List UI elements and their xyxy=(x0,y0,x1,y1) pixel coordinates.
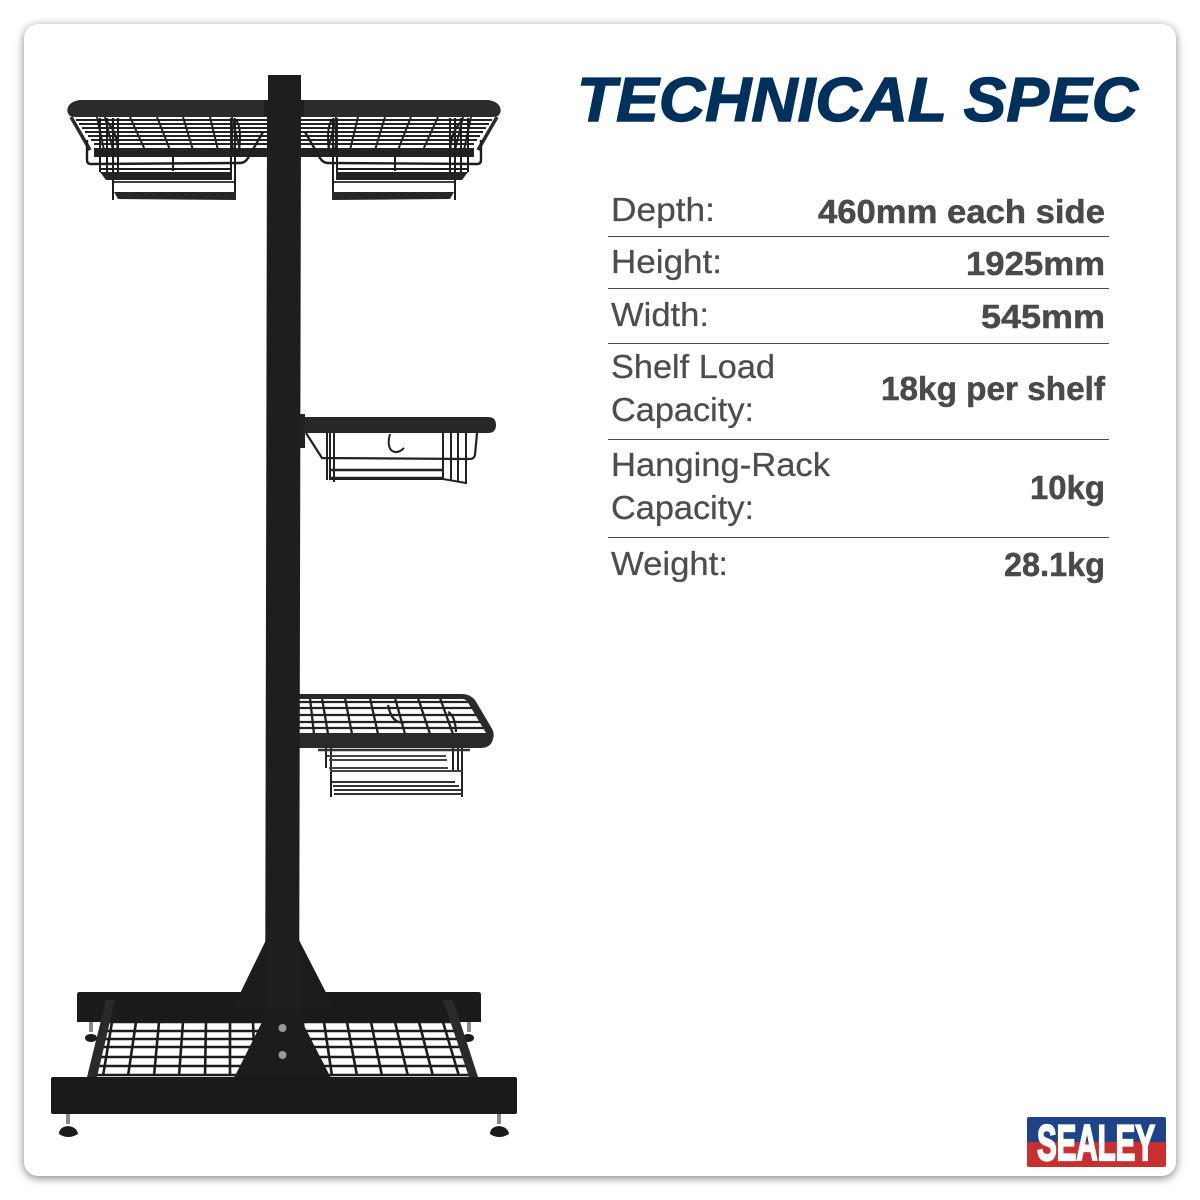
row: height: 1925mm xyxy=(966,245,1105,282)
row: hanging-rack capacity xyxy=(608,446,1109,538)
product: storage rack xyxy=(51,75,517,1137)
row: hanging-rack capacity: Hanging-Rack xyxy=(611,446,831,483)
row: width: 545mm xyxy=(981,298,1105,335)
row: width: Width: xyxy=(611,296,709,333)
row: shelf load capacity: Shelf Load xyxy=(611,348,775,385)
top shelf left xyxy=(67,100,272,200)
row: depth: Depth: xyxy=(611,191,715,228)
lower shelf xyxy=(296,694,494,797)
row: height: Height: xyxy=(611,243,722,280)
front base rail xyxy=(51,1077,517,1114)
levelling feet xyxy=(59,1114,509,1137)
front gusset with bolts xyxy=(234,1012,331,1081)
central post xyxy=(264,75,304,1080)
base mesh xyxy=(96,1022,473,1076)
row: shelf load capacity: 18kg per shelf xyxy=(881,370,1106,407)
row: width xyxy=(608,296,1109,344)
top shelf right xyxy=(296,100,501,200)
row: shelf load capacity: Capacity: xyxy=(611,391,754,428)
row: height xyxy=(608,243,1109,289)
row: hanging-rack capacity: 10kg xyxy=(1030,469,1105,506)
rear base rail xyxy=(77,992,481,1042)
row: depth: 460mm each side xyxy=(818,193,1105,230)
title: TECHNICAL SPEC xyxy=(577,66,1139,135)
spec table xyxy=(608,191,1109,583)
row: hanging-rack capacity: Capacity: xyxy=(611,489,754,526)
base side rails xyxy=(87,1000,478,1077)
middle shelf xyxy=(298,414,496,484)
row: shelf load capacity xyxy=(608,348,1109,440)
row: depth xyxy=(608,191,1109,237)
row: weight xyxy=(611,545,1105,583)
row: weight: 28.1kg xyxy=(1004,546,1105,583)
row: weight: Weight: xyxy=(611,545,728,582)
rear gusset xyxy=(232,940,335,1010)
